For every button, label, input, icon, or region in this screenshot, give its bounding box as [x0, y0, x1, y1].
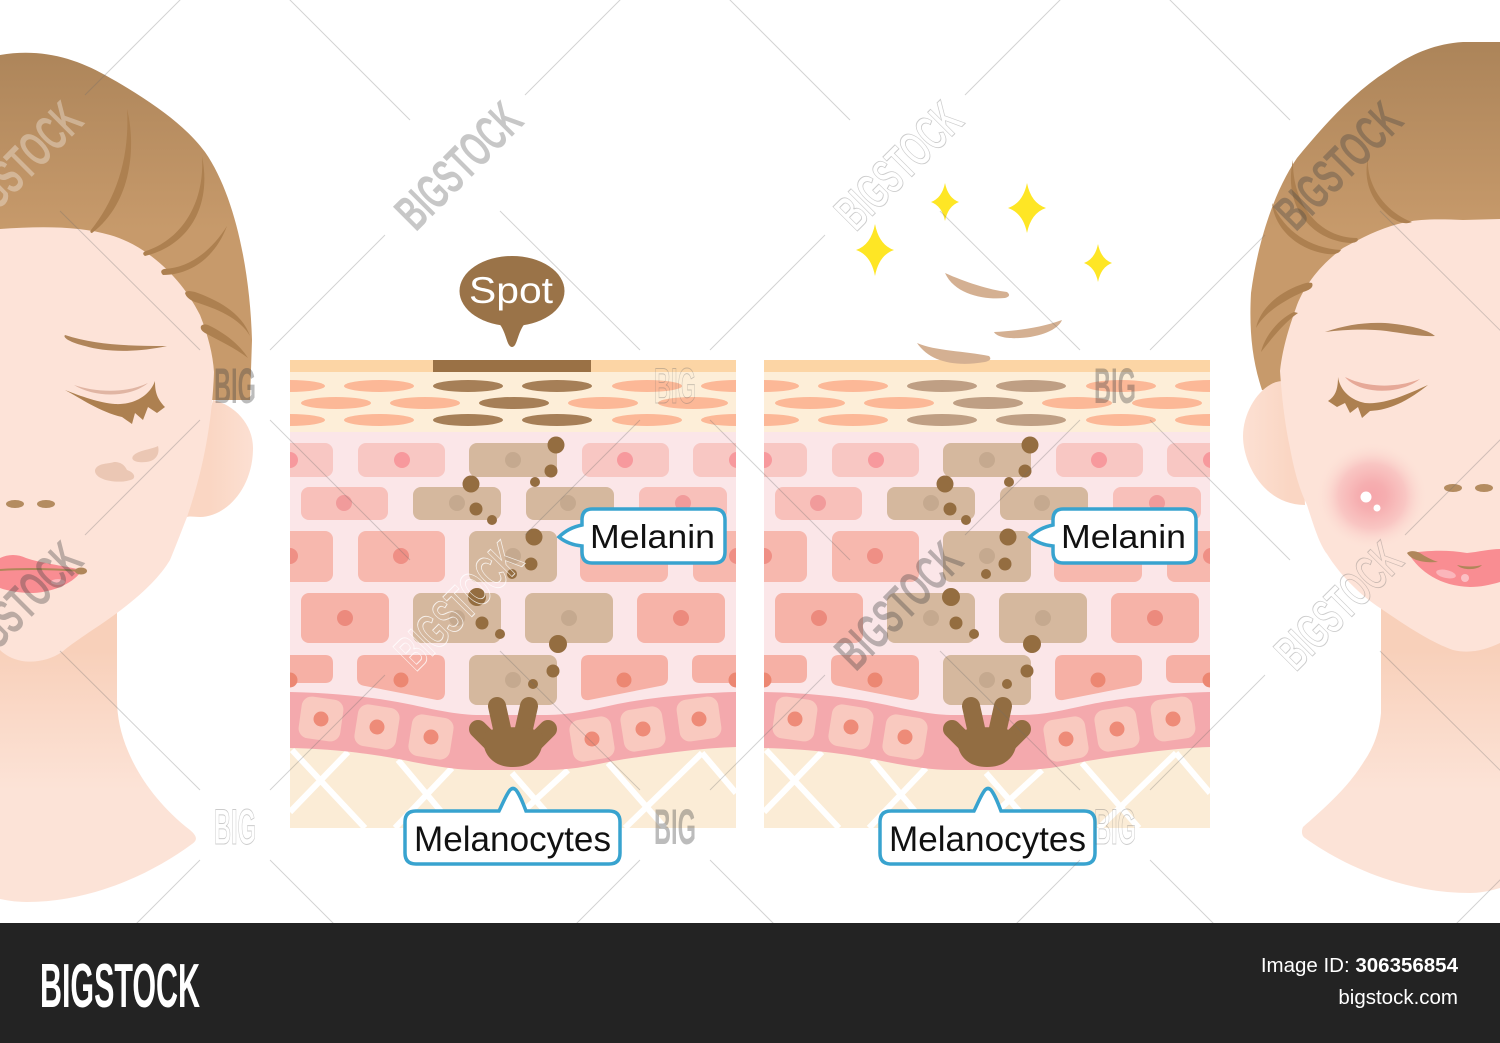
left eyebrow [64, 335, 167, 351]
site url: bigstock.com [1338, 986, 1458, 1009]
left face: woman with dark spots [0, 53, 253, 902]
panel: skin cross-section with spot removed [764, 360, 1210, 866]
melanocyte [952, 706, 1022, 767]
right hair [1250, 42, 1500, 420]
melanin label [559, 509, 725, 563]
melanin granules [462, 436, 567, 689]
melanocyte [478, 706, 548, 767]
left face shape [0, 227, 214, 662]
image id: Image ID: 306356854 [1261, 954, 1459, 977]
melanin label [1030, 509, 1196, 563]
watermark: BIGSTOCK marks: BIGSTOCK [384, 91, 533, 240]
melanin label: Melanin [590, 518, 715, 555]
left cheek dark spots [95, 446, 158, 482]
cells, basal layer and dermis [754, 432, 1227, 828]
panel: skin cross-section with spot [255, 256, 771, 864]
text: BIG [1094, 358, 1136, 414]
melanocytes label: Melanocytes [414, 820, 611, 859]
spot speech bubble: Spot [469, 270, 554, 311]
watermark: BIGSTOCK marks: BIGSTOCK [1264, 531, 1413, 680]
melanocytes label [880, 788, 1095, 864]
melanin label: Melanin [1061, 518, 1186, 555]
watermark: BIGSTOCK marks: BIGSTOCK [384, 531, 533, 680]
surface layer cells [764, 380, 1210, 426]
watermark: BIG marks: BIG [214, 358, 256, 414]
horny layer [764, 360, 1210, 432]
peeling skin flakes [917, 273, 1062, 364]
spot speech bubble [460, 256, 564, 347]
yellow sparkles [856, 183, 1112, 282]
watermark: BIG marks: BIG [654, 358, 696, 414]
right face shape [1280, 219, 1500, 652]
left neck [0, 600, 196, 902]
right hair strands [1256, 158, 1412, 352]
cells, basal layer and dermis [280, 432, 753, 828]
right ear [1243, 381, 1305, 505]
left nose [6, 500, 55, 508]
right cheek blush with highlights [1316, 442, 1428, 550]
footer banner [0, 923, 1500, 1043]
watermark: BIGSTOCK marks [0, 91, 1413, 680]
melanocytes label [405, 788, 620, 864]
watermark: BIG marks: BIG [654, 799, 696, 855]
footer banner: BIGSTOCK [40, 952, 200, 1021]
left ear [187, 400, 253, 517]
right nose [1444, 484, 1493, 492]
left closed eye [65, 381, 165, 424]
right face: woman with clear skin [1243, 42, 1500, 893]
horny layer with brown spot band [290, 360, 736, 432]
melanin granules [936, 436, 1041, 689]
right eyebrow [1325, 323, 1435, 336]
watermark: BIG marks: BIG [214, 799, 256, 855]
surface layer cells [290, 380, 736, 426]
text: BIG [1094, 799, 1136, 855]
melanocytes label: Melanocytes [889, 820, 1086, 859]
left hair [0, 53, 252, 400]
watermark: BIGSTOCK marks: BIGSTOCK [824, 531, 973, 680]
right lips [1407, 549, 1500, 587]
watermark: BIGSTOCK marks: BIGSTOCK [824, 91, 973, 240]
watermark: BIG marks [214, 358, 1136, 855]
watermark: BIGSTOCK marks: BIGSTOCK [1264, 91, 1413, 240]
left hair strands [90, 109, 250, 358]
left lips [0, 555, 87, 593]
right neck [1302, 600, 1500, 893]
right closed eye [1328, 377, 1428, 418]
